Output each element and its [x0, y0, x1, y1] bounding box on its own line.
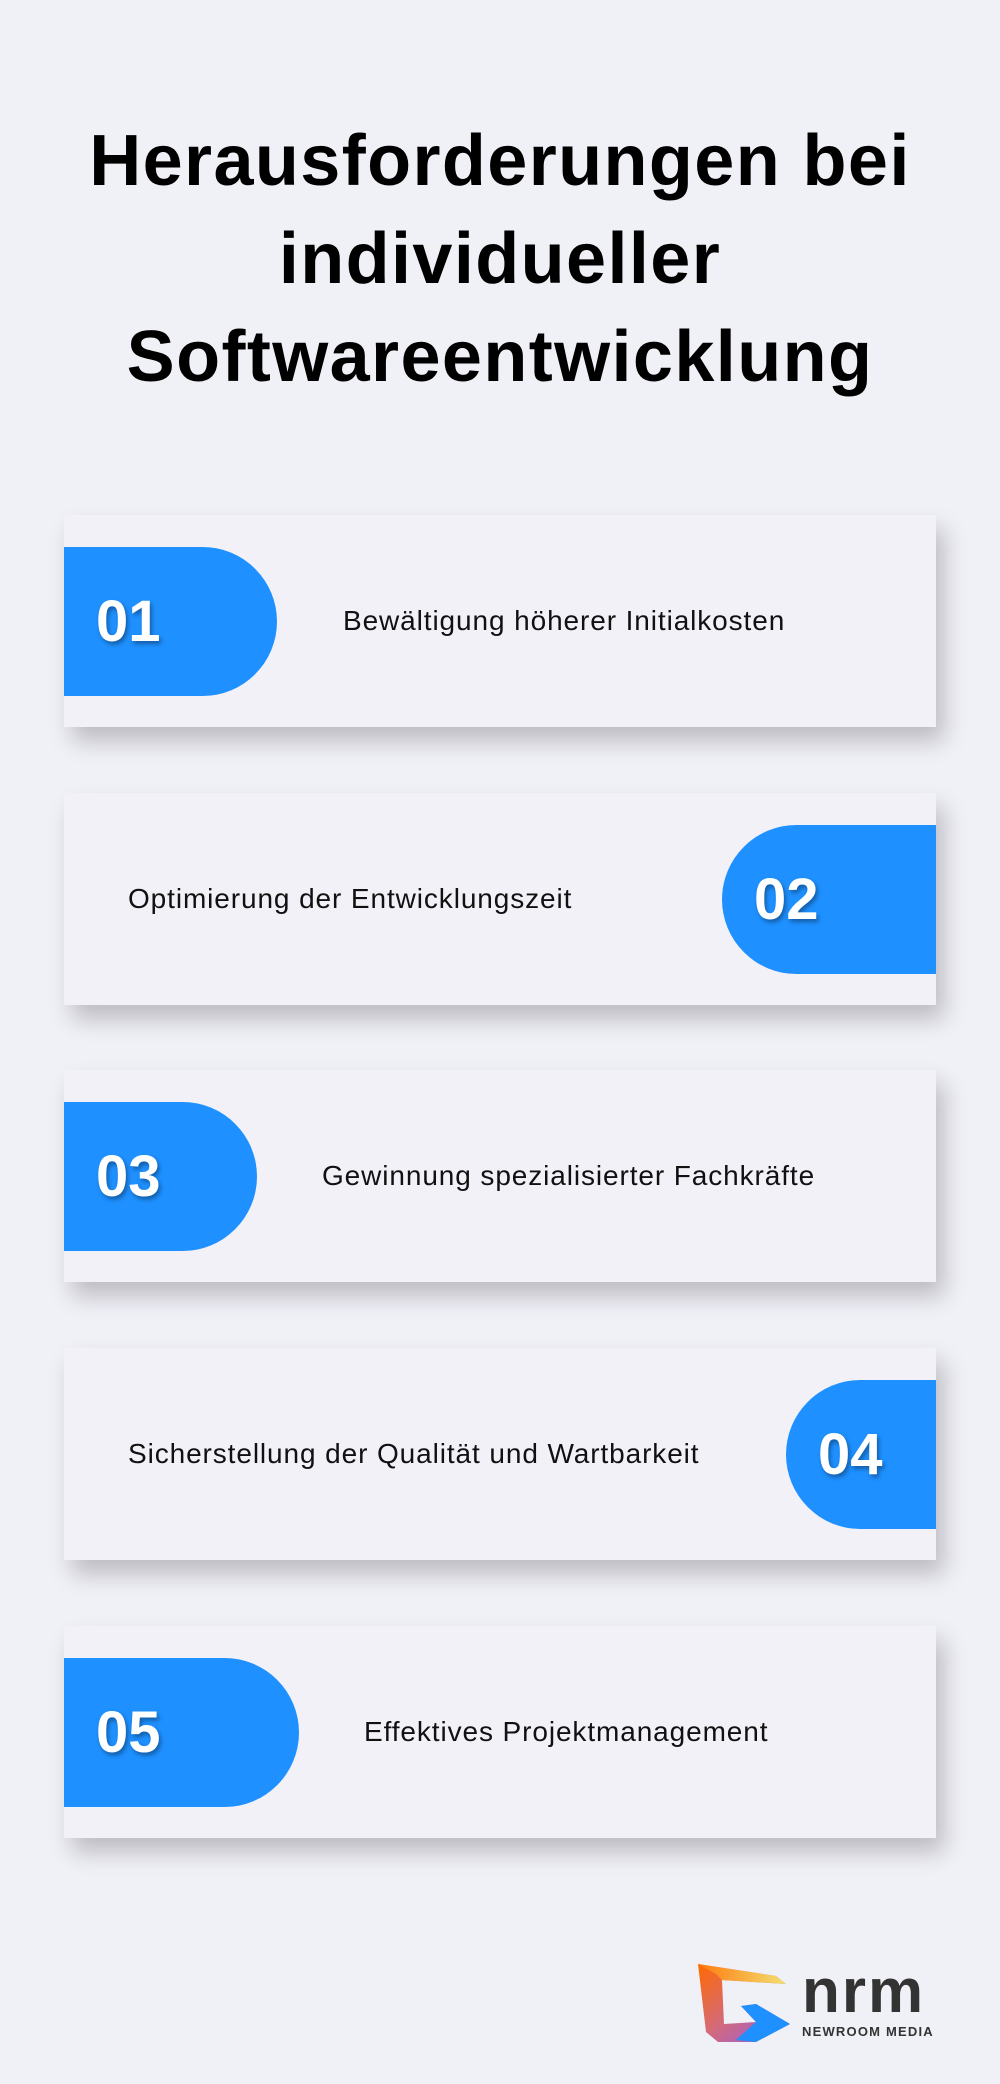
title: Softwareentwicklung [127, 317, 873, 397]
text 4: Sicherstellung der Qualität und Wartbarkeit [128, 1438, 699, 1469]
card 4 [64, 1348, 936, 1560]
pill 03: 03 [96, 1144, 161, 1209]
logo text nrm: nrm [802, 1957, 925, 2026]
icon: logo mark [698, 1964, 790, 2042]
text 2: Optimierung der Entwicklungszeit [128, 883, 572, 914]
logo subtitle: NEWROOM MEDIA [802, 2024, 934, 2039]
pill 03 [64, 1102, 257, 1251]
title: Herausforderungen bei [89, 121, 911, 201]
text 5: Effektives Projektmanagement [364, 1716, 768, 1747]
text 1: Bewältigung höherer Initialkosten [343, 605, 785, 636]
pill 02: 02 [754, 867, 819, 932]
card 3 [64, 1070, 936, 1282]
text 3: Gewinnung spezialisierter Fachkräfte [322, 1160, 815, 1191]
title [89, 121, 911, 397]
card 5 [64, 1626, 936, 1838]
pill 02 [722, 825, 936, 974]
pill 05 [64, 1658, 299, 1807]
pill 01 [64, 547, 277, 696]
logo [698, 1957, 934, 2042]
title: individueller [279, 219, 721, 299]
pill 04: 04 [818, 1422, 883, 1487]
pill 05: 05 [96, 1700, 161, 1765]
pill 01: 01 [96, 589, 161, 654]
card 2 [64, 793, 936, 1005]
card 1 [64, 515, 936, 727]
pill 04 [786, 1380, 936, 1529]
